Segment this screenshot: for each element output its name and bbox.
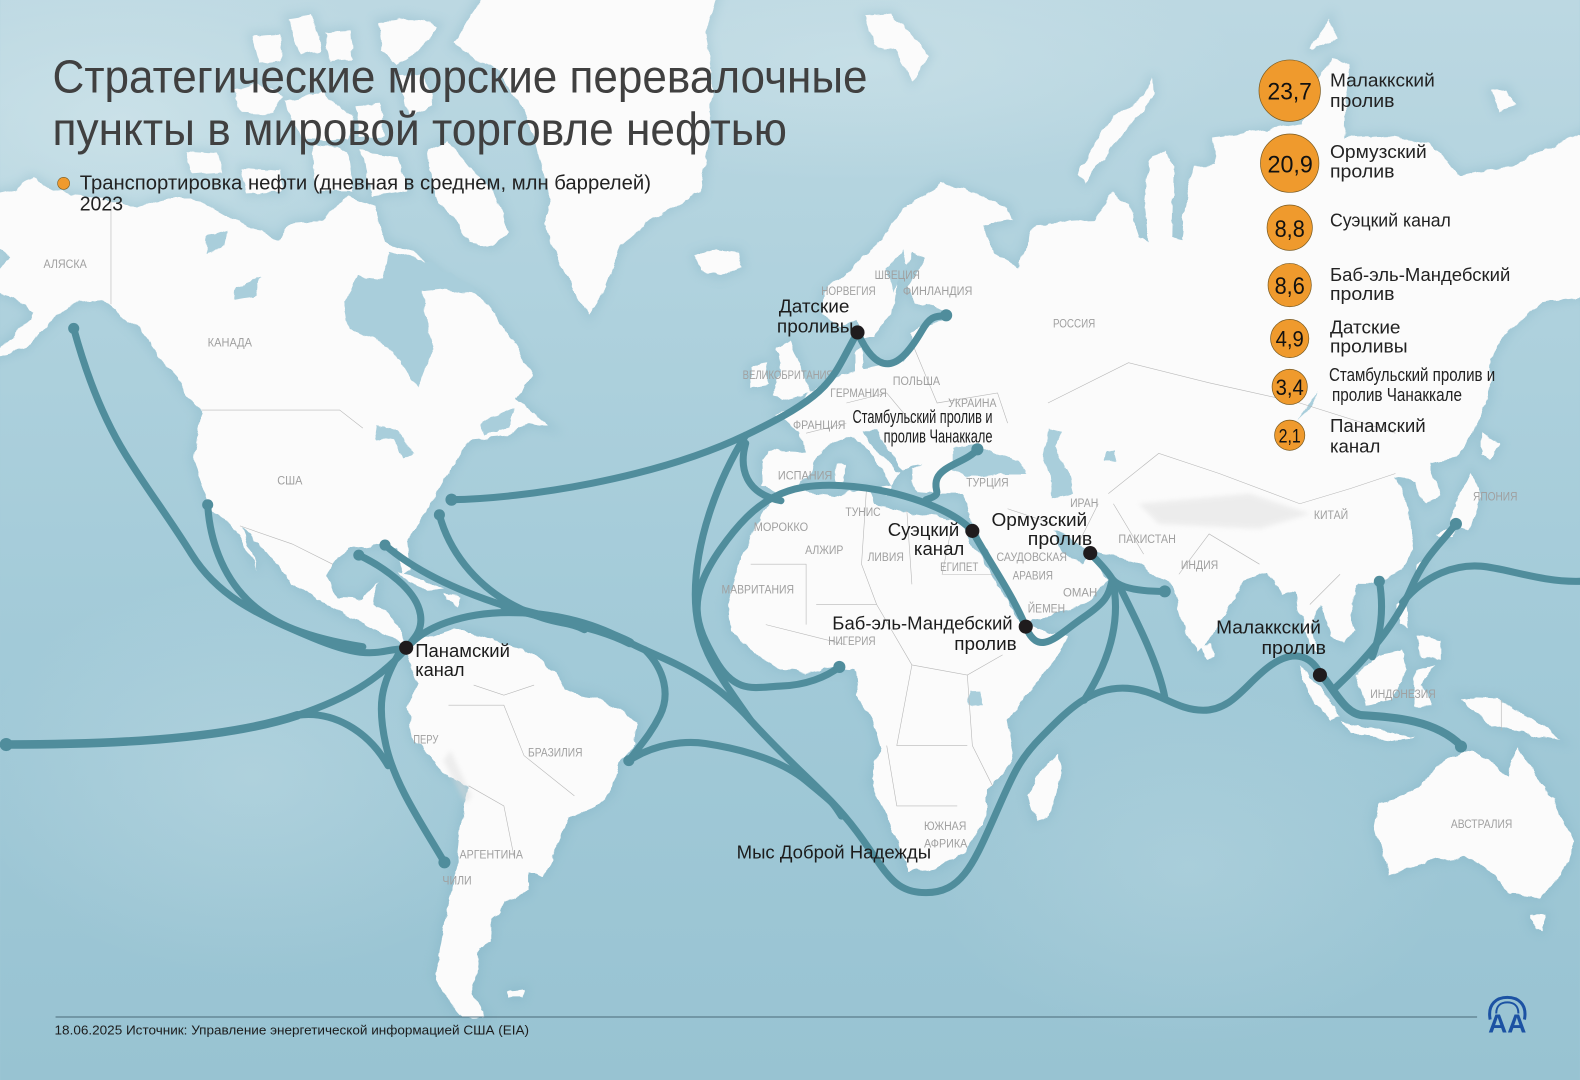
item: Suez: 8,8 [1275, 216, 1305, 243]
map country labels: ИСПАНИЯ [778, 469, 832, 483]
map country labels: АЛЖИР [805, 543, 843, 557]
map country labels: ОМАН [1063, 585, 1097, 599]
map country labels: ФРАНЦИЯ [793, 418, 845, 432]
chokepoint labels: пролив Чанаккале [884, 426, 992, 446]
chokepoint labels: Суэцкий [888, 520, 959, 540]
title [53, 51, 868, 155]
item: Bab el-Mandeb: пролив [1330, 284, 1394, 304]
item: Turkish straits [1272, 365, 1495, 405]
item: Hormuz: Ормузский [1330, 142, 1427, 162]
map country labels: ПАКИСТАН [1118, 532, 1176, 546]
map country labels: НИГЕРИЯ [828, 634, 876, 648]
item: Panama: Панамский [1330, 416, 1426, 436]
item: Danish straits: проливы [1330, 337, 1408, 357]
chokepoint labels: Датские [779, 296, 849, 316]
map country labels: АФРИКА [924, 836, 968, 850]
map country labels: ШВЕЦИЯ [875, 268, 920, 282]
map country labels: ВЕЛИКОБРИТАНИЯ [743, 368, 833, 382]
chokepoint markers [399, 325, 1327, 682]
legend: oil transit: Транспортировка нефти (дневная в среднем, млн баррелей) [80, 172, 651, 194]
map country labels: США [277, 474, 303, 488]
footer source: 18.06.2025 Источник: Управление энергетической информацией США (EIA) [55, 1023, 529, 1038]
map country labels: АРГЕНТИНА [460, 847, 524, 861]
item: Panama: канал [1330, 436, 1380, 456]
item: Malacca [1259, 60, 1435, 121]
item: Malacca: пролив [1330, 91, 1394, 111]
item: Bab el-Mandeb: 8,6 [1275, 273, 1305, 300]
chokepoint labels [415, 296, 1326, 862]
legend: oil transit [58, 172, 651, 216]
map country labels: РОССИЯ [1053, 316, 1095, 330]
bubble list: oil volumes [1259, 60, 1510, 456]
chokepoint labels: пролив [1261, 638, 1326, 658]
inland water [207, 230, 1318, 705]
chokepoint labels: пролив [954, 634, 1017, 654]
map country labels: АРАВИЯ [1013, 568, 1053, 582]
shipping routes [6, 315, 1580, 893]
chokepoint labels: Мыс Доброй Надежды [737, 842, 931, 862]
chokepoint labels: Ормузский [991, 510, 1087, 530]
map country labels: АВСТРАЛИЯ [1451, 817, 1512, 831]
mountain relief shading [443, 494, 1310, 804]
item: Hormuz: пролив [1330, 161, 1394, 181]
country borders [111, 198, 1501, 856]
map country labels: МОРОККО [754, 520, 808, 534]
map country labels: ЮЖНАЯ [924, 819, 966, 833]
item: Suez [1267, 205, 1451, 250]
route end caps [0, 309, 1467, 868]
map country labels: ТУНИС [845, 505, 881, 519]
map country labels: КИТАЙ [1314, 507, 1348, 522]
logo: AA: AA [1488, 1009, 1527, 1039]
map country labels: ФИНЛАНДИЯ [903, 284, 972, 298]
item: Danish straits: 4,9 [1276, 327, 1304, 352]
map country labels: ИНДИЯ [1181, 558, 1218, 572]
map country labels [43, 257, 1517, 888]
chokepoint labels: канал [415, 660, 465, 680]
item: Panama: 2,1 [1279, 426, 1301, 447]
map country labels: ПОЛЬША [893, 374, 941, 388]
map country labels: МАВРИТАНИЯ [721, 582, 794, 596]
title: пункты в мировой торговле нефтью [53, 103, 787, 155]
item: Turkish straits: Стамбульский пролив и [1329, 365, 1495, 385]
map country labels: УКРАИНА [948, 396, 997, 410]
map country labels: САУДОВСКАЯ [997, 550, 1067, 564]
item: Bab el-Mandeb [1268, 263, 1510, 307]
item: Bab el-Mandeb: Баб-эль-Мандебский [1330, 265, 1510, 285]
item: Suez: Суэцкий канал [1330, 211, 1451, 231]
map country labels: АЛЯСКА [43, 257, 88, 271]
map country labels: КАНАДА [208, 336, 253, 350]
map country labels: ЯПОНИЯ [1473, 490, 1517, 504]
chokepoint labels: канал [914, 539, 964, 559]
item: Hormuz: 20,9 [1268, 151, 1313, 178]
item: Turkish straits: 3,4 [1276, 375, 1304, 400]
map country labels: ИРАН [1070, 496, 1098, 510]
chokepoint labels: Баб-эль-Мандебский [832, 614, 1013, 634]
item: Danish straits: Датские [1330, 317, 1401, 337]
chokepoint labels: проливы [777, 316, 853, 336]
chokepoint labels: пролив [1028, 529, 1092, 549]
map country labels: ПЕРУ [413, 733, 439, 747]
map country labels: БРАЗИЛИЯ [528, 746, 582, 760]
title: Стратегические морские перевалочные [53, 51, 868, 103]
item: Malacca: 23,7 [1268, 79, 1312, 106]
map country labels: ЛИВИЯ [868, 550, 904, 564]
map country labels: НОРВЕГИЯ [821, 284, 876, 298]
chokepoint labels: Малаккский [1216, 618, 1321, 638]
item: Hormuz [1260, 134, 1427, 192]
legend: oil transit: 2023 [80, 194, 123, 216]
item: Turkish straits: пролив Чанаккале [1332, 385, 1462, 405]
item: Danish straits [1271, 317, 1408, 358]
chokepoint labels: Панамский [415, 641, 510, 661]
map country labels: ТУРЦИЯ [966, 476, 1009, 490]
map country labels: ЙЕМЕН [1028, 601, 1065, 616]
item: Panama [1275, 416, 1426, 456]
map country labels: ЕГИПЕТ [940, 560, 979, 574]
map country labels: ЧИЛИ [442, 874, 472, 888]
chokepoint labels: Стамбульский пролив и [852, 407, 993, 427]
map country labels: ГЕРМАНИЯ [830, 386, 887, 400]
map country labels: ИНДОНЕЗИЯ [1370, 687, 1436, 701]
item: Malacca: Малаккский [1330, 71, 1435, 91]
